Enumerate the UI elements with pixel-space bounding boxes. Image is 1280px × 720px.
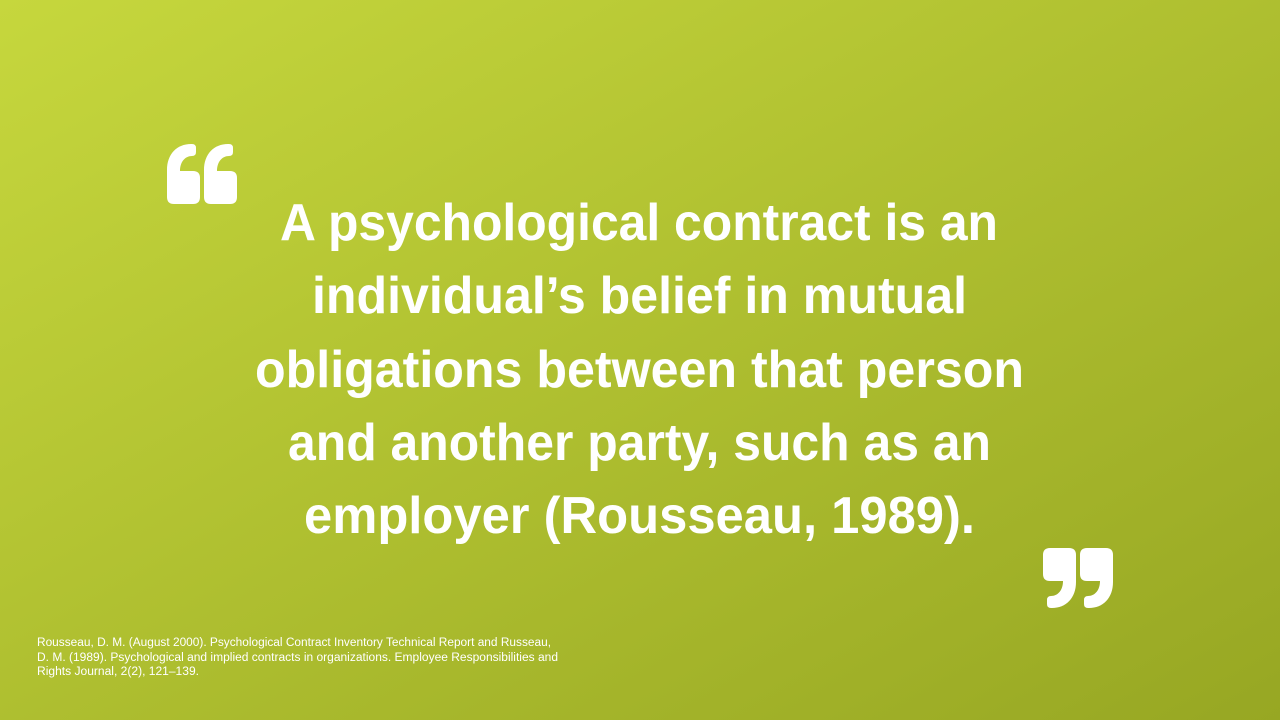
quote text: A psychological contract is an bbox=[280, 194, 998, 252]
quote text bbox=[255, 194, 1024, 545]
source citation: Rights Journal, 2(2), 121–139. bbox=[37, 666, 199, 678]
source citation bbox=[37, 637, 558, 678]
quote text: obligations between that person bbox=[255, 341, 1024, 399]
quote text: individual’s belief in mutual bbox=[312, 267, 967, 325]
icon: closing quotation mark bbox=[1043, 548, 1113, 608]
icon: opening quotation mark bbox=[167, 144, 237, 204]
quote text: and another party, such as an bbox=[288, 414, 991, 472]
source citation: Rousseau, D. M. (August 2000). Psychological Contract Inventory Technical Report and Russeau, bbox=[37, 637, 551, 649]
quote text: employer (Rousseau, 1989). bbox=[304, 487, 975, 545]
source citation: D. M. (1989). Psychological and implied contracts in organizations. Employee Responsibilities and bbox=[37, 652, 558, 664]
